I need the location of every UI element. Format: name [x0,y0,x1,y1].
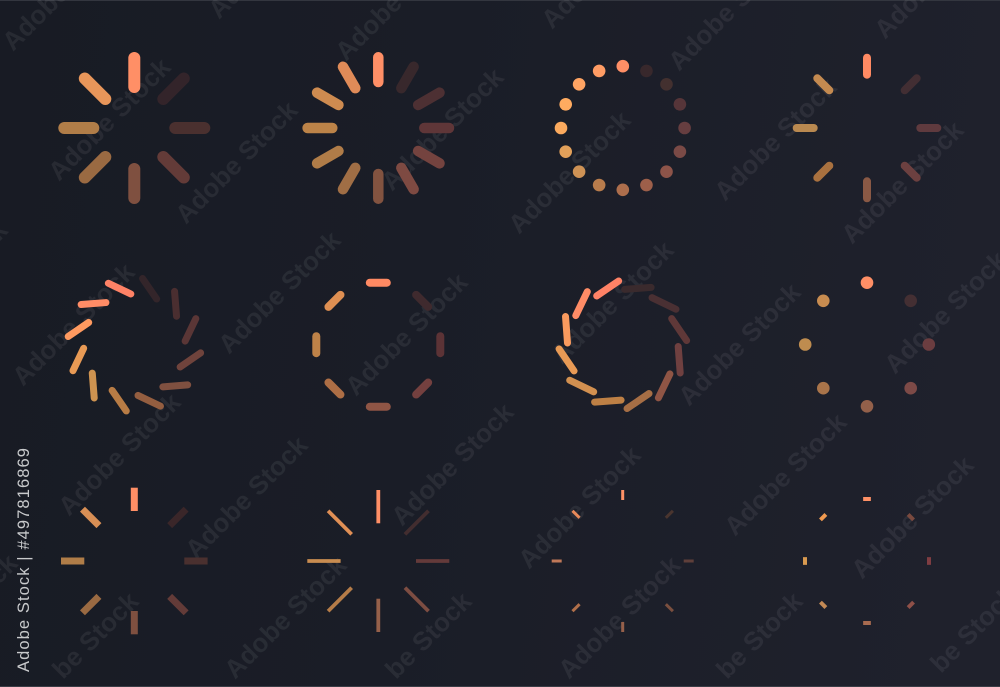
spinner 6: eight tangential bars [316,283,440,407]
spinner 12: eight tiny tangential dashes [803,497,931,625]
spinner 2: twelve rounded bars [308,57,449,199]
spinner 1: eight rounded bars [64,58,204,198]
watermark pattern: be Stock [379,586,478,684]
spinner 9: eight square-ended thick bars [61,488,208,634]
watermark pattern: Adobe Stock [375,62,510,196]
watermark pattern: Adobe Stock [339,267,474,401]
watermark pattern: Adobe Stock [218,550,353,684]
watermark pattern: Adobe Stock [672,277,807,411]
watermark pattern: Adobe Stock [212,225,347,359]
watermark pattern: be Stock [46,586,145,684]
spinner 11: eight tiny thin ticks [552,490,694,632]
watermark pattern: Adobe Stock [169,95,304,229]
spinner 8: eight dots [799,276,935,413]
watermark pattern: Adobe Stock [42,52,177,186]
spinner 5: twelve pinwheel bars [68,278,201,411]
watermark pattern: Adobe Stock [552,550,687,684]
watermark pattern: Adobe Stock [718,407,853,541]
spinner 4: eight short rounded bars [797,58,937,198]
watermark pattern: Adobe Stock [512,440,647,574]
watermark pattern: Adobe Stock [502,105,637,239]
stock id caption: Adobe Stock | #497816869 [15,448,33,672]
watermark pattern: Adobe Stock [545,235,680,369]
spinner 7: twelve slanted ring bars [559,281,687,409]
watermark pattern: be Stock [710,586,809,684]
spinner 3: sixteen dots [555,60,691,196]
watermark pattern: Adobe Stock [845,450,980,584]
watermark pattern: Adobe Stock [708,72,843,206]
watermark pattern: Adobe Stock [179,430,314,564]
watermark pattern: Adobe Stock [52,387,187,521]
watermark pattern: Adobe Stock [385,397,520,531]
watermark pattern: Adobe Stock [6,257,141,391]
spinner 10: eight long thin bars [307,490,449,632]
watermark pattern: Adobe Stock [835,115,970,249]
